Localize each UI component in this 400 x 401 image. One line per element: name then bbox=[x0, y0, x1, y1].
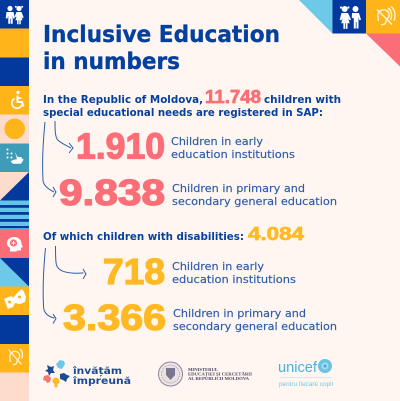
text block: intro sentence: children with bbox=[264, 94, 341, 106]
text block: disabilities subtitle bbox=[43, 223, 305, 244]
icon: children holding hands top right bbox=[340, 6, 361, 29]
stat: 3.366 primary and secondary: Children in primary and bbox=[173, 308, 306, 320]
stat: 718 early education: 718 bbox=[103, 251, 165, 292]
icon: head with plus bbox=[7, 237, 23, 252]
logo: unicef: pentru fiecare copil bbox=[279, 382, 333, 388]
stat: 1.910 early education: 1.910 bbox=[76, 126, 165, 166]
number: total children: 11.748 bbox=[205, 86, 261, 107]
icon: yellow circle bbox=[4, 118, 25, 139]
arrow: to early education bbox=[55, 121, 73, 153]
icon: ministry seal bbox=[158, 362, 182, 386]
stat: 9.838 primary and secondary: 9.838 bbox=[59, 172, 165, 213]
logo: invatam impreuna bbox=[43, 360, 131, 388]
arrow: to primary and secondary bbox=[43, 122, 56, 197]
title: in numbers bbox=[43, 47, 180, 75]
icon: wheelchair user bbox=[12, 91, 24, 108]
logo: unicef: unicef bbox=[278, 359, 318, 376]
icon: unicef globe bbox=[318, 359, 332, 373]
icon: children holding hands bbox=[6, 6, 24, 24]
stat: 718 early education: Children in early bbox=[172, 261, 264, 273]
stat: 718 early education: education institutions bbox=[172, 274, 296, 286]
icon: hand reading braille bbox=[6, 148, 24, 164]
logo: ministry bbox=[158, 362, 253, 386]
title bbox=[43, 20, 280, 75]
text block: intro sentence bbox=[43, 86, 341, 119]
icon: hearing impaired ear top right bbox=[377, 6, 395, 25]
icon: puzzle flower mark bbox=[43, 360, 70, 388]
icon: hearing impaired ear bbox=[8, 349, 23, 365]
panel: left icon sidebar bbox=[0, 0, 29, 401]
logo: ministry: MINISTERUL bbox=[188, 367, 218, 372]
logo: invatam impreuna: împreună bbox=[72, 375, 131, 387]
stat: 718 early education bbox=[103, 251, 296, 292]
stat: 3.366 primary and secondary: 3.366 bbox=[63, 297, 166, 338]
logo: ministry: EDUCAȚIEI ȘI CERCETĂRII bbox=[188, 372, 253, 376]
arrow: to disabilities primary and secondary bbox=[43, 248, 56, 324]
number: children with disabilities: 4.084 bbox=[248, 223, 305, 244]
text block: intro sentence: In the Republic of Moldova, bbox=[43, 94, 203, 106]
stat: 1.910 early education: Children in early bbox=[171, 136, 263, 148]
panel: top right corner tiles bbox=[299, 0, 400, 66]
logo: unicef bbox=[278, 359, 333, 388]
text block: intro sentence: special educational needs are registered in SAP: bbox=[43, 107, 323, 119]
stat: 3.366 primary and secondary: secondary general education bbox=[173, 321, 337, 333]
stat: 9.838 primary and secondary: secondary general education bbox=[172, 196, 337, 208]
stat: 1.910 early education: education institutions bbox=[171, 149, 295, 161]
logo: ministry: AL REPUBLICII MOLDOVA bbox=[188, 376, 249, 381]
stat: 9.838 primary and secondary: Children in primary and bbox=[172, 183, 305, 195]
logo: invatam impreuna: învățăm bbox=[72, 365, 122, 377]
icon: sign language hands bbox=[4, 289, 26, 309]
stat: 9.838 primary and secondary bbox=[59, 172, 337, 213]
stat: 1.910 early education bbox=[76, 126, 295, 166]
arrow: to disabilities early education bbox=[56, 246, 86, 279]
stat: 3.366 primary and secondary bbox=[63, 297, 337, 338]
text block: disabilities subtitle: Of which children with disabilities: bbox=[43, 231, 244, 243]
title: Inclusive Education bbox=[43, 20, 280, 48]
